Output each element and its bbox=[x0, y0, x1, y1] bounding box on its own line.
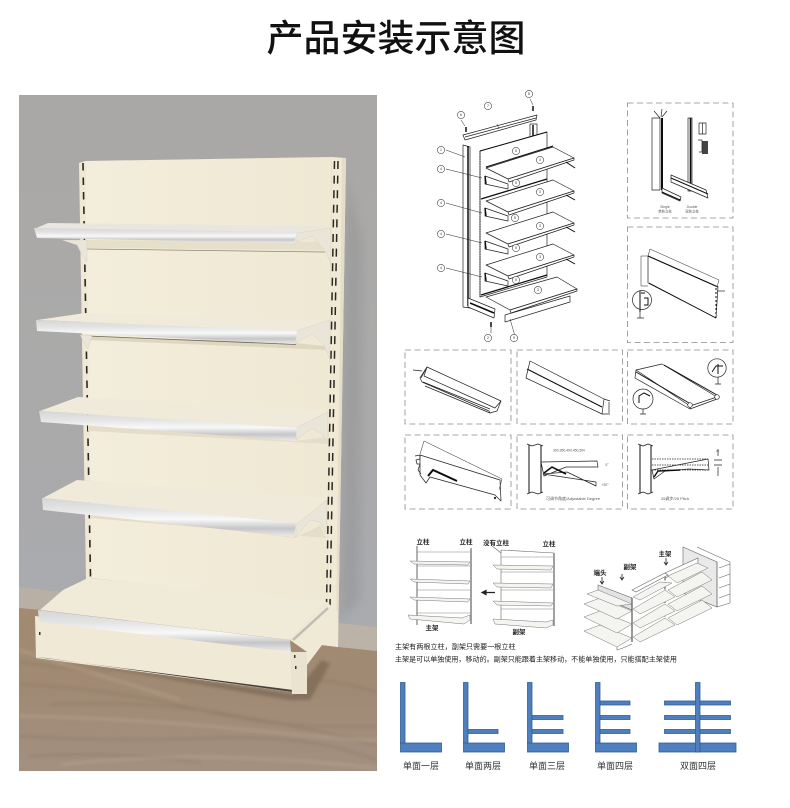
wall shadow bbox=[342, 208, 360, 610]
main frame top and shelves bbox=[665, 558, 698, 578]
label: 没有立柱: 没有立柱 bbox=[483, 538, 510, 547]
diagram box: shelf board with detail circles bbox=[628, 350, 733, 424]
label: 端头: 端头 bbox=[594, 568, 607, 577]
diagram box: upright posts, single and double bbox=[628, 103, 733, 218]
part number callouts bbox=[437, 90, 544, 342]
part number callouts: 5 bbox=[515, 149, 517, 153]
icon: single sided three tiers bbox=[528, 682, 568, 752]
diagram: main frame bbox=[408, 546, 471, 625]
title: 产品安装示意图 bbox=[266, 8, 526, 62]
diagram box: adjustable degree bracket: +20° bbox=[601, 483, 609, 487]
diagram: shelf run with end cap, secondary and main frames bbox=[584, 547, 730, 650]
part number callouts: 5 bbox=[515, 181, 517, 185]
diagram box: back panel bbox=[628, 227, 733, 342]
dimension text: 300,350,400,450,500 bbox=[553, 448, 585, 452]
label: 立柱 secondary: 立柱 bbox=[542, 539, 556, 548]
label: 单面两层: 单面两层 bbox=[465, 760, 501, 771]
shelf 2 bbox=[36, 313, 330, 360]
leader lines bbox=[446, 99, 533, 336]
back panel bbox=[480, 132, 547, 297]
diagram box: shelf lip bbox=[405, 350, 511, 424]
arrows: callout pointers bbox=[600, 558, 668, 584]
label: 副架 on run: 副架 bbox=[624, 562, 637, 571]
shelf 1 bbox=[34, 223, 331, 265]
label: 双面四层: 双面四层 bbox=[680, 761, 716, 771]
base shelf bbox=[35, 578, 338, 694]
diagram box: adjustable degree bracket: 0° bbox=[605, 463, 609, 467]
caption: adjustable degree: 可调节角度/Adjustable Degree bbox=[546, 495, 601, 501]
right upright slots bbox=[326, 161, 338, 606]
floor shadow bbox=[96, 660, 330, 701]
left upright bbox=[79, 161, 92, 580]
part number callouts: 3 bbox=[537, 288, 539, 292]
part number callouts: 3 bbox=[539, 224, 541, 228]
skirting board left bbox=[19, 587, 60, 610]
right upright bbox=[322, 157, 346, 647]
diagram: exploded shelf assembly bbox=[437, 90, 577, 342]
end cap panel bbox=[598, 585, 632, 610]
part number callouts: 5 bbox=[515, 246, 517, 250]
part number callouts: 9 bbox=[513, 336, 515, 340]
caption: pitch: 25调步/25 Pitch bbox=[661, 495, 689, 501]
part number callouts: 3 bbox=[539, 255, 541, 259]
label: 主架 on run: 主架 bbox=[658, 549, 672, 558]
screws bbox=[466, 106, 533, 327]
diagram box: adjustable degree bracket bbox=[517, 435, 622, 509]
part number callouts: 5 bbox=[515, 278, 517, 282]
shelf 3 bbox=[39, 397, 328, 444]
diagram box: upright posts, single and double: 单柱立柱 bbox=[658, 208, 672, 214]
secondary frame top and shelves bbox=[632, 573, 668, 592]
diagram box: upright posts, single and double: Double bbox=[687, 205, 697, 209]
label: 立柱 left: 立柱 bbox=[416, 537, 430, 546]
part number callouts: 4 bbox=[440, 232, 442, 236]
icon: single sided two tiers bbox=[464, 682, 504, 752]
arrow: frame attaches to main frame bbox=[482, 590, 495, 594]
rear panel bbox=[85, 157, 332, 604]
front shelves bbox=[584, 625, 632, 647]
part number callouts: 3 bbox=[539, 190, 541, 194]
icon: single sided one tier bbox=[400, 682, 442, 752]
wooden floor bbox=[19, 606, 377, 771]
part number callouts: 1 bbox=[440, 148, 442, 152]
label: 单面三层: 单面三层 bbox=[529, 760, 565, 771]
upright post bbox=[463, 145, 495, 318]
diagram box: pitch bracket: 25 bbox=[716, 449, 720, 453]
label: 立柱 right: 立柱 bbox=[460, 537, 473, 546]
shelf brackets bbox=[485, 162, 575, 286]
diagram box: shelf front strip bbox=[517, 350, 622, 424]
label: 单面一层: 单面一层 bbox=[403, 760, 439, 771]
diagram: secondary frame bbox=[491, 545, 554, 628]
note text line 1: 主架有两根立柱，副架只需要一根立柱 bbox=[395, 642, 516, 651]
diagram box: upright posts, single and double: 双柱立柱 bbox=[685, 208, 699, 214]
part number callouts: 7 bbox=[487, 104, 489, 108]
part number callouts: 4 bbox=[440, 167, 442, 171]
caption: single and double: Single bbox=[660, 205, 670, 209]
label: 单面四层: 单面四层 bbox=[597, 760, 633, 771]
shelf 4 bbox=[42, 480, 327, 538]
far back panel bbox=[683, 547, 717, 607]
part number callouts: 3 bbox=[539, 158, 541, 162]
part number callouts: 8 bbox=[528, 92, 530, 96]
icon: single sided four tiers bbox=[596, 682, 636, 752]
diagram box: pitch bracket bbox=[628, 435, 733, 509]
note text line 2: 主架是可以单独使用，移动的。副架只能跟着主架移动，不能单独使用，只能搭配主架使用 bbox=[395, 654, 677, 664]
label: 副架: 副架 bbox=[512, 627, 526, 636]
left upright slots bbox=[83, 163, 90, 578]
shelf tiers bbox=[481, 146, 577, 322]
skirting board right bbox=[338, 623, 377, 651]
part number callouts: 5 bbox=[514, 216, 516, 220]
part number callouts: 4 bbox=[440, 201, 442, 205]
diagram box: bracket bbox=[405, 435, 511, 509]
icon: double sided four tiers bbox=[659, 682, 736, 752]
part number callouts: 4 bbox=[440, 266, 442, 270]
part number callouts: 6 bbox=[460, 113, 462, 117]
part number callouts: 2 bbox=[487, 336, 489, 340]
label: 主架: 主架 bbox=[426, 623, 439, 632]
top cap bbox=[463, 115, 537, 144]
photo: cream supermarket shelf unit bbox=[19, 95, 377, 771]
wall background bbox=[19, 95, 377, 670]
